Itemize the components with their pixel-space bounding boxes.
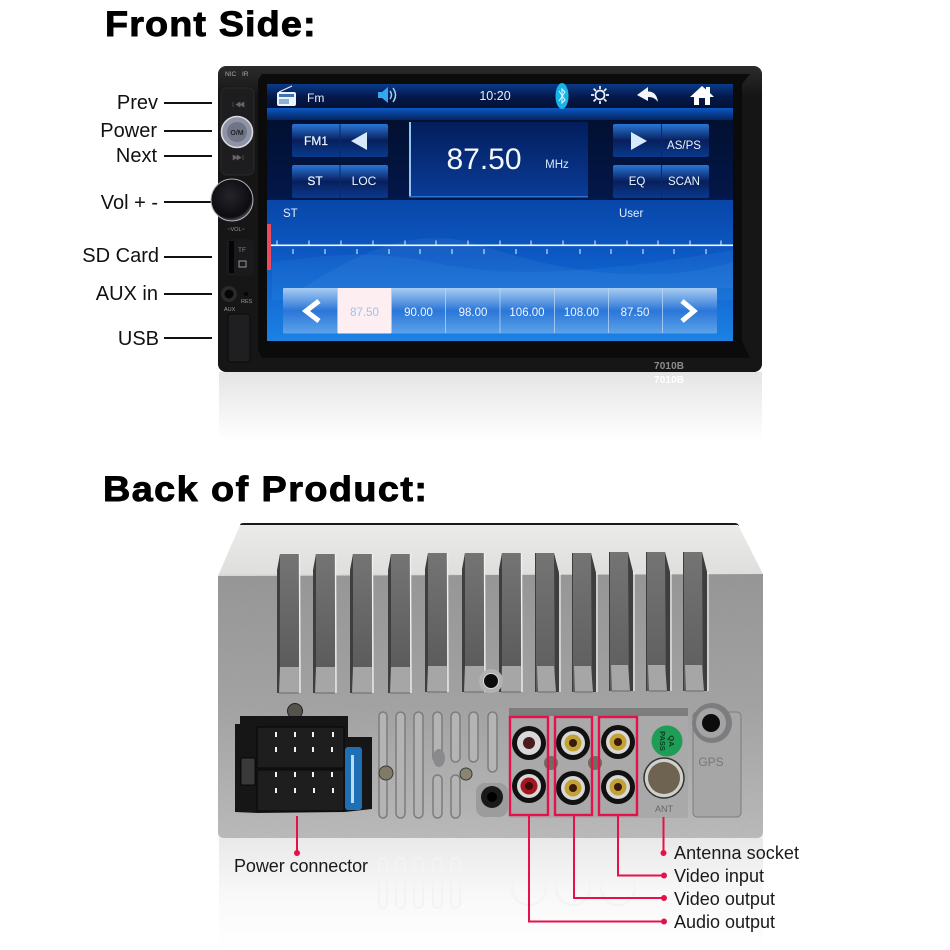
label: AUX in [96, 283, 212, 305]
text: Fm: Fm [307, 91, 324, 105]
icon: radio [277, 86, 296, 106]
buttons: FM1 and prev [292, 124, 388, 157]
QA pass sticker: QA [667, 735, 676, 747]
front device reflection: 7010B [654, 375, 684, 386]
vent slots [379, 712, 497, 818]
power button: O/M [230, 130, 244, 137]
callout: video input: Video input [674, 866, 764, 886]
label: Prev: Prev [117, 92, 158, 114]
back device reflection [219, 838, 763, 950]
text: time: 10:20 [479, 89, 511, 103]
tuner scale [267, 224, 733, 270]
buttons: EQ and SCAN: SCAN [668, 176, 700, 188]
label: Vol + - [101, 192, 212, 214]
status bar [267, 84, 733, 110]
buttons: ST and LOC [292, 165, 388, 198]
red highlight boxes [510, 717, 637, 815]
buttons: FM1 and prev: FM1 [304, 134, 328, 148]
text: ANT: ANT [655, 804, 674, 814]
aux jack: AUX [224, 307, 236, 313]
SD card slot [226, 239, 254, 276]
aux jack [221, 286, 253, 313]
fuse [345, 747, 362, 810]
volume knob: ~VOL~ [227, 227, 245, 233]
screw hole [479, 669, 503, 693]
small rear jack [476, 783, 508, 817]
preset bar [283, 288, 717, 334]
icon: settings sun [591, 86, 609, 104]
prev button [233, 102, 244, 107]
preset bar: 87.50 [350, 307, 379, 319]
label: Prev [117, 92, 212, 114]
top edge line [240, 523, 739, 526]
preset bar: 90.00 [404, 307, 433, 319]
screws and plug [288, 704, 472, 780]
frequency display: 87.50 [446, 143, 522, 176]
frequency display [409, 122, 588, 198]
callout: audio output: Audio output [674, 912, 775, 932]
RCA: video out yellow top [556, 726, 590, 760]
callout: video input [618, 815, 764, 886]
label: Power: Power [100, 120, 157, 142]
label: USB: USB [118, 328, 159, 350]
label: USB [118, 328, 212, 350]
lower area [267, 200, 733, 341]
callout: antenna socket: Antenna socket [674, 843, 799, 863]
arrow: left [306, 301, 319, 321]
top face [218, 525, 763, 576]
left control strip [211, 71, 254, 362]
SD card slot: TF [238, 247, 246, 254]
pins [276, 732, 333, 793]
label: AUX in: AUX in [96, 283, 158, 305]
QA pass sticker: PASS [658, 731, 667, 751]
rear face [218, 574, 763, 838]
next button [233, 155, 243, 160]
buttons: next and AS/PS: AS/PS [667, 140, 701, 152]
RCA: video in yellow bottom [601, 770, 635, 804]
callout: audio output [529, 815, 775, 932]
preset bar: 106.00 [509, 307, 545, 319]
model number: 7010B [654, 361, 684, 372]
blue band [267, 108, 733, 120]
frequency display: MHz [545, 159, 569, 171]
front labels with leader lines [82, 92, 212, 350]
label: Vol + -: Vol + - [101, 192, 158, 214]
preset bar: 87.50 [621, 307, 649, 319]
buttons: next and AS/PS [613, 124, 709, 157]
bezel [218, 66, 762, 372]
icon: home [690, 86, 714, 105]
icon: back arrow [637, 87, 658, 102]
power button [222, 116, 252, 148]
buttons: ST and LOC: ST [307, 174, 323, 188]
heat sink fins [277, 552, 708, 693]
AV panel recess [509, 708, 688, 818]
power connector [235, 716, 372, 813]
volume knob [211, 179, 253, 233]
RCA: video out yellow bottom [556, 771, 590, 805]
antenna socket [644, 758, 684, 798]
GPS socket [692, 703, 741, 817]
front device [211, 66, 762, 372]
icon: speaker [378, 87, 396, 103]
callout: power connector: Power connector [234, 856, 368, 876]
buttons: EQ and SCAN [613, 165, 709, 198]
USB cover [228, 314, 250, 362]
text: User: User [619, 208, 643, 220]
arrow: right [682, 301, 694, 321]
front device reflection [219, 372, 762, 440]
label: Next: Next [116, 145, 157, 167]
QA pass sticker [652, 726, 682, 756]
screen [267, 83, 733, 341]
callout: power connector [234, 816, 368, 876]
grain [218, 574, 763, 838]
preset bar: 108.00 [564, 307, 599, 319]
left control strip: IR [242, 71, 249, 78]
label: Next [116, 145, 212, 167]
middle control area [267, 120, 733, 200]
left control strip: NIC [225, 71, 236, 78]
RCA mounting screws [544, 756, 602, 770]
aux jack: RES [241, 299, 253, 305]
label: SD Card: SD Card [82, 245, 159, 267]
RCA: video in yellow top [601, 725, 635, 759]
label: SD Card [82, 245, 212, 267]
RCA: audio red [512, 769, 546, 803]
preset bar: 98.00 [459, 307, 487, 319]
title: front side: Front Side: [105, 4, 316, 44]
callout: video output [574, 815, 775, 909]
title: back of product: Back of Product: [103, 469, 427, 509]
label: Power [100, 120, 212, 142]
buttons: EQ and SCAN: EQ [629, 176, 645, 188]
buttons: ST and LOC: LOC [352, 174, 377, 188]
text: ST: ST [283, 208, 298, 220]
inner bezel frame [258, 74, 750, 358]
callout: video output: Video output [674, 889, 775, 909]
icon: bluetooth [556, 83, 568, 109]
waves [272, 250, 733, 300]
GPS socket: GPS [698, 755, 724, 769]
RCA: audio white [512, 726, 546, 760]
back device [218, 523, 763, 838]
callout: antenna socket [660, 817, 799, 863]
